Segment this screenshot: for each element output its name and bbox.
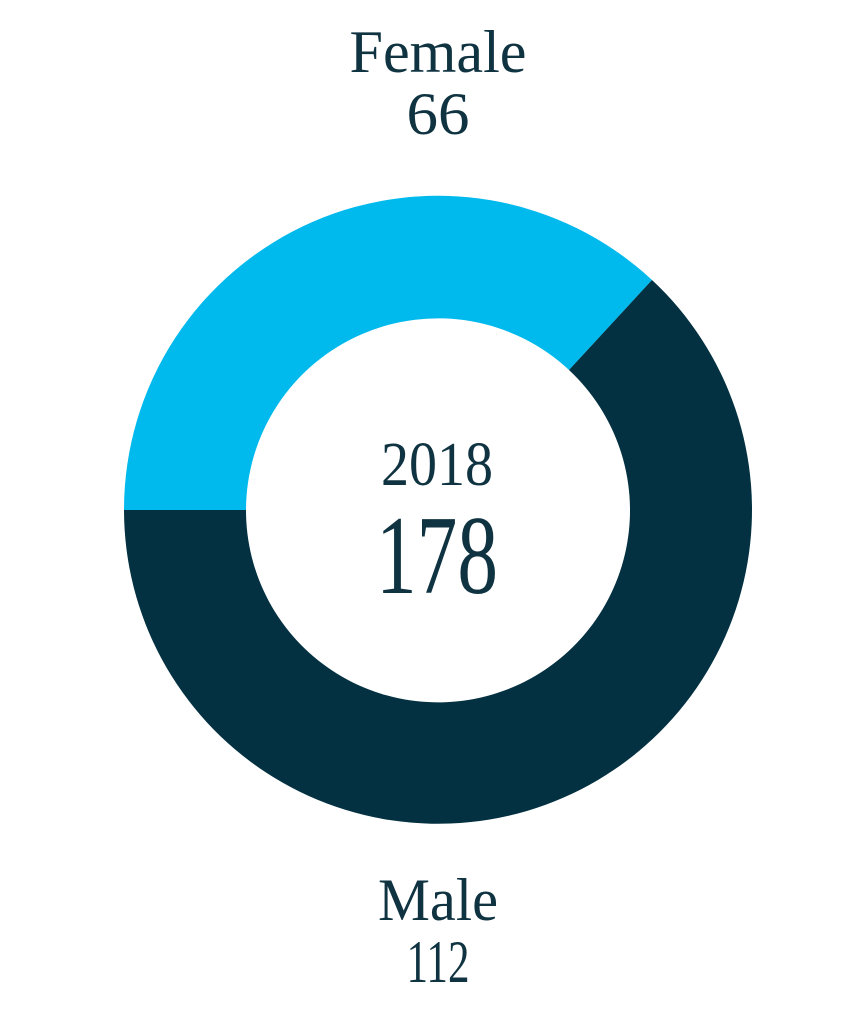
center total: [376, 431, 498, 618]
center total: 178: [376, 494, 498, 618]
segment: female: [124, 196, 652, 510]
label: female count: 66: [406, 81, 470, 147]
segment: male: [124, 280, 752, 824]
label: female count: [350, 19, 526, 147]
donut chart: [124, 196, 752, 824]
label: male count: [378, 867, 498, 995]
label: female count: Female: [350, 19, 526, 85]
label: male count: Male: [378, 867, 498, 933]
center total: 2018: [381, 431, 493, 499]
label: male count: 112: [406, 929, 470, 995]
